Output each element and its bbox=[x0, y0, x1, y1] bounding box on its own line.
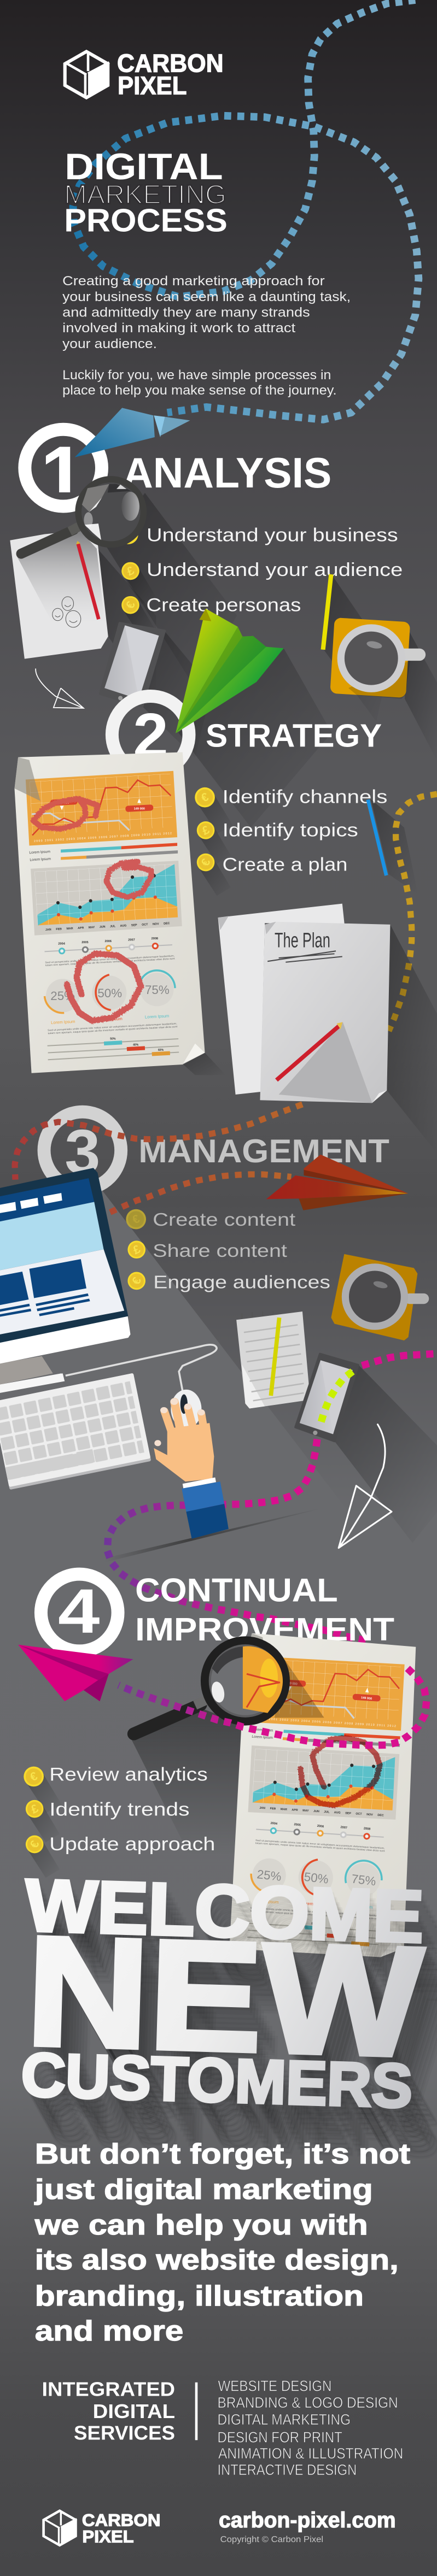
orange dotted path bbox=[15, 1104, 302, 1180]
timeline: 2007 bbox=[128, 938, 135, 942]
timeline: 2005 bbox=[81, 941, 89, 944]
number circle 4 bbox=[41, 1574, 118, 1651]
green paper plane bbox=[176, 609, 284, 733]
closing statement: and more bbox=[35, 2315, 183, 2347]
number circle 3: 3 bbox=[65, 1117, 100, 1187]
lorem bars: Lorem Ipsum bbox=[29, 850, 51, 855]
heading: management: MANAGEMENT bbox=[138, 1133, 389, 1169]
donut charts bbox=[45, 971, 178, 1034]
services list bbox=[217, 2377, 403, 2478]
list: continual improvement bbox=[49, 1765, 215, 1855]
icon: cube bbox=[65, 51, 109, 98]
services heading: DIGITAL bbox=[93, 2400, 175, 2422]
list: continual improvement: Review analytics bbox=[49, 1765, 208, 1785]
bullet coin 2: £ bbox=[125, 564, 136, 578]
analytics paper 2 bbox=[213, 1628, 437, 1968]
desk slot bbox=[104, 1508, 321, 1562]
timeline: 2008 bbox=[152, 937, 158, 940]
bullet coin 8: £ bbox=[131, 1242, 142, 1257]
intro text: Creating a good marketing approach for bbox=[62, 274, 325, 289]
bullet coin 9 bbox=[127, 1272, 145, 1290]
blue pencil bbox=[368, 799, 418, 895]
title bbox=[64, 146, 228, 238]
timeline: totam rem aperiam, eaque ipsa quae ab illo inventore veritatis et quasi architecto beatae vitae dicta sunt bbox=[45, 957, 176, 967]
logo wordmark: CARBON bbox=[82, 2510, 161, 2530]
bullet coin 6 bbox=[197, 854, 231, 896]
services list: BRANDING & LOGO DESIGN bbox=[217, 2394, 398, 2411]
lorem bars: Lorem Ipsum bbox=[30, 857, 51, 862]
sketch plane doodle bbox=[36, 668, 84, 708]
section: 1 analysis bbox=[10, 408, 437, 1073]
bullet coin 1: € bbox=[123, 527, 134, 542]
area chart bbox=[31, 861, 182, 936]
services heading: SERVICES bbox=[74, 2421, 175, 2444]
list: management: Engage audiences bbox=[153, 1273, 330, 1293]
logo: Carbon Pixel bbox=[65, 49, 224, 99]
monitor stand bbox=[0, 1356, 53, 1385]
bullet coin 11: £ bbox=[29, 1802, 40, 1816]
number circle 1: 1 bbox=[40, 430, 85, 520]
orange line chart: 149 000 bbox=[134, 808, 145, 811]
website url: carbon-pixel.com bbox=[219, 2508, 396, 2532]
analytics paper bbox=[14, 752, 205, 1073]
number circle 2: 2 bbox=[133, 701, 168, 771]
heading: analysis: ANALYSIS bbox=[123, 450, 331, 497]
headline: welcome new customers: NEW bbox=[24, 1904, 427, 2089]
donut charts: Lorem Ipsum bbox=[145, 1013, 170, 1020]
number circle 1 bbox=[25, 430, 102, 520]
intro text bbox=[62, 274, 351, 398]
list: strategy: Identify topics bbox=[223, 820, 358, 841]
services heading: INTEGRATED bbox=[42, 2378, 175, 2401]
the plan papers bbox=[218, 904, 437, 1153]
headline: welcome new customers bbox=[20, 1864, 427, 2120]
pink dotted path over paper bbox=[119, 1668, 427, 1745]
heading: strategy: STRATEGY bbox=[206, 717, 382, 754]
headline: welcome new customers: WELCOME bbox=[24, 1864, 425, 1958]
icon: cube bbox=[44, 2511, 77, 2545]
sketch plane doodle 2 bbox=[339, 1425, 392, 1548]
donut charts: Sed ut perspiciatis unde omnis iste natus error sit voluptatem accusantium doloremque laudantium, bbox=[48, 1022, 177, 1032]
list: management: Create content bbox=[153, 1210, 296, 1230]
lens shadow on paper bbox=[275, 1660, 324, 1718]
smartphone bbox=[100, 624, 165, 706]
progress bars: 50% bbox=[110, 1038, 116, 1041]
bullet coin 5: £ bbox=[200, 823, 212, 838]
logo wordmark: PIXEL bbox=[82, 2527, 134, 2546]
bullet coin 9: € bbox=[129, 1275, 144, 1286]
orange line chart bbox=[26, 771, 177, 845]
bullet coin 5 bbox=[197, 821, 231, 864]
list: strategy bbox=[223, 786, 387, 875]
intro text: your business can seem like a daunting task, bbox=[62, 290, 351, 304]
services divider bbox=[195, 2383, 197, 2440]
title: PROCESS bbox=[64, 202, 228, 238]
yellow pencil bbox=[323, 574, 331, 650]
services list: DIGITAL MARKETING bbox=[217, 2411, 351, 2428]
title: MARKETING bbox=[64, 180, 226, 209]
donut charts: 75% bbox=[145, 983, 170, 997]
services heading bbox=[42, 2378, 175, 2444]
title: DIGITAL bbox=[65, 146, 223, 187]
section: plan and management bbox=[0, 904, 437, 1392]
heading: continual improvement bbox=[135, 1572, 394, 1648]
services list: ANIMATION & ILLUSTRATION bbox=[218, 2445, 403, 2462]
sketch paper bbox=[10, 529, 108, 659]
copyright: Copyright © Carbon Pixel bbox=[220, 2535, 323, 2544]
logo wordmark: PIXEL bbox=[118, 71, 187, 99]
progress bars: 60% bbox=[158, 1049, 164, 1052]
logo wordmark bbox=[117, 49, 224, 99]
section: intro bbox=[62, 0, 418, 420]
footer logo bbox=[44, 2510, 161, 2546]
website screen bbox=[0, 1178, 94, 1221]
intro text: Luckily for you, we have simple processes in bbox=[62, 368, 331, 383]
list: continual improvement: Identify trends bbox=[49, 1799, 190, 1820]
intro text: involved in making it work to attract bbox=[62, 321, 296, 336]
hand on mouse bbox=[104, 1398, 321, 1562]
coffee cup 2 bbox=[331, 1254, 424, 1340]
gold dotted path bbox=[389, 794, 437, 1031]
blue paper plane bbox=[75, 408, 190, 457]
red scribble on paper bbox=[300, 1738, 380, 1805]
smartphone 2 bbox=[295, 1354, 358, 1441]
intro text: your audience. bbox=[62, 337, 157, 351]
closing statement: its also website design, bbox=[35, 2244, 399, 2276]
logo wordmark bbox=[82, 2510, 161, 2546]
services list: WEBSITE DESIGN bbox=[218, 2377, 331, 2395]
heading: continual improvement: IMPROVEMENT bbox=[135, 1611, 394, 1648]
red paper plane bbox=[266, 1155, 409, 1210]
services list: DESIGN FOR PRINT bbox=[217, 2428, 342, 2445]
phone shadow bbox=[335, 1365, 437, 1543]
bullet coin 12 bbox=[26, 1836, 60, 1878]
long shadows bbox=[97, 493, 437, 827]
bullet coin 7 bbox=[126, 1209, 146, 1229]
pink dotted path bbox=[107, 1354, 433, 1643]
coffee cup bbox=[330, 617, 419, 699]
pink paper plane bbox=[18, 1645, 133, 1701]
section: workspace and improvement bbox=[0, 1311, 437, 1968]
donut charts: 50% bbox=[97, 986, 122, 1000]
bullet coin 4: € bbox=[199, 790, 211, 805]
list: continual improvement: Update approach bbox=[49, 1834, 215, 1855]
magnifying glass bbox=[21, 479, 143, 554]
logo wordmark: CARBON bbox=[117, 49, 224, 78]
donut charts: 25% bbox=[50, 989, 75, 1003]
bullet coin 7: € bbox=[130, 1212, 142, 1227]
orange line chart: 100 000 bbox=[58, 801, 69, 804]
progress bars: 40% bbox=[133, 1043, 139, 1046]
timeline: Sed ut perspiciatis unde omnis iste natus error sit voluptatem accusantium doloremque laudantium, bbox=[45, 954, 174, 964]
closing statement bbox=[34, 2138, 410, 2347]
headline: welcome new customers: CUSTOMERS bbox=[20, 2040, 413, 2120]
heading: continual improvement: CONTINUAL bbox=[135, 1572, 338, 1609]
list: analysis: Understand your business bbox=[147, 525, 398, 545]
blue dotted path bbox=[73, 0, 418, 420]
red dotted path bbox=[110, 1174, 292, 1212]
orange line chart: 2000 2001 2002 2003 2004 2005 2006 2007 2008 2009 2010 2011 2012 bbox=[34, 832, 172, 843]
section: footer bbox=[42, 2377, 403, 2546]
red pencil bbox=[277, 1026, 339, 1080]
monitor light wedge bbox=[0, 1189, 350, 1514]
area chart: JAN FEB MAR APR MAY JUN JUL AUG SEP OCT NOV DEC bbox=[45, 922, 170, 932]
chart paper shadow bbox=[183, 1053, 226, 1075]
lorem bars bbox=[29, 843, 178, 862]
bullet coin 12: € bbox=[27, 1838, 42, 1850]
closing statement: But don’t forget, it’s not bbox=[35, 2138, 410, 2170]
timeline: 2006 bbox=[105, 940, 112, 943]
bullet coin 11 bbox=[26, 1800, 60, 1842]
bullet coin 3 bbox=[121, 596, 155, 638]
the plan handwriting: The Plan bbox=[275, 929, 330, 952]
number circle 2 bbox=[112, 696, 189, 773]
progress bars bbox=[48, 1038, 179, 1060]
magnifier handle shadow bbox=[130, 1707, 245, 1855]
list: management: Share content bbox=[153, 1241, 288, 1261]
smiley doodles bbox=[53, 597, 81, 627]
intro text: place to help you make sense of the journey. bbox=[62, 383, 337, 398]
services list: INTERACTIVE DESIGN bbox=[217, 2461, 357, 2478]
notepad bbox=[236, 1311, 310, 1409]
list: strategy: Identify channels bbox=[223, 786, 387, 807]
magnifying glass 2 bbox=[134, 1640, 285, 1734]
bullet coin 4 bbox=[195, 787, 233, 834]
donut charts: Lorem Ipsum bbox=[98, 1016, 123, 1022]
bullet coin 6: € bbox=[199, 857, 213, 868]
red scribbles bbox=[33, 799, 152, 1021]
list: management bbox=[153, 1210, 330, 1293]
list: analysis: Create personas bbox=[147, 595, 301, 615]
bullet coin 10 bbox=[24, 1767, 62, 1813]
section: welcome bbox=[20, 1765, 437, 2347]
bullet coin 3: € bbox=[123, 599, 138, 611]
number circle 3 bbox=[44, 1112, 121, 1189]
timeline bbox=[45, 937, 176, 967]
timeline: 2004 bbox=[58, 943, 66, 946]
long shadow of welcome text bbox=[23, 1869, 437, 2171]
bullet coin 1 bbox=[118, 524, 138, 544]
bullet coin 10: € bbox=[28, 1769, 39, 1784]
donut charts: totam rem aperiam, eaque ipsa quae ab illo inventore veritatis et quasi architecto beatae vitae dicta sunt bbox=[48, 1025, 178, 1034]
closing statement: just digital marketing bbox=[34, 2174, 373, 2206]
mouse and cable bbox=[0, 1345, 217, 1428]
number circle 4: 4 bbox=[58, 1577, 100, 1646]
list: strategy: Create a plan bbox=[223, 854, 347, 875]
bullet coin 2 bbox=[121, 562, 155, 604]
desktop monitor bbox=[0, 1168, 130, 1392]
intro text: and admittedly they are many strands bbox=[62, 305, 310, 320]
donut charts: Lorem Ipsum bbox=[51, 1019, 75, 1025]
list: analysis: Understand your audience bbox=[147, 560, 403, 580]
lime dotted path bbox=[320, 1372, 353, 1426]
closing statement: we can help you with bbox=[34, 2209, 368, 2241]
keyboard bbox=[0, 1373, 151, 1490]
bullet coin 8 bbox=[127, 1240, 145, 1258]
red pencil bbox=[76, 541, 98, 619]
closing statement: branding, illustration bbox=[35, 2280, 364, 2312]
handle bbox=[21, 530, 74, 554]
folded corner bbox=[14, 757, 205, 1064]
list: analysis bbox=[147, 525, 403, 615]
